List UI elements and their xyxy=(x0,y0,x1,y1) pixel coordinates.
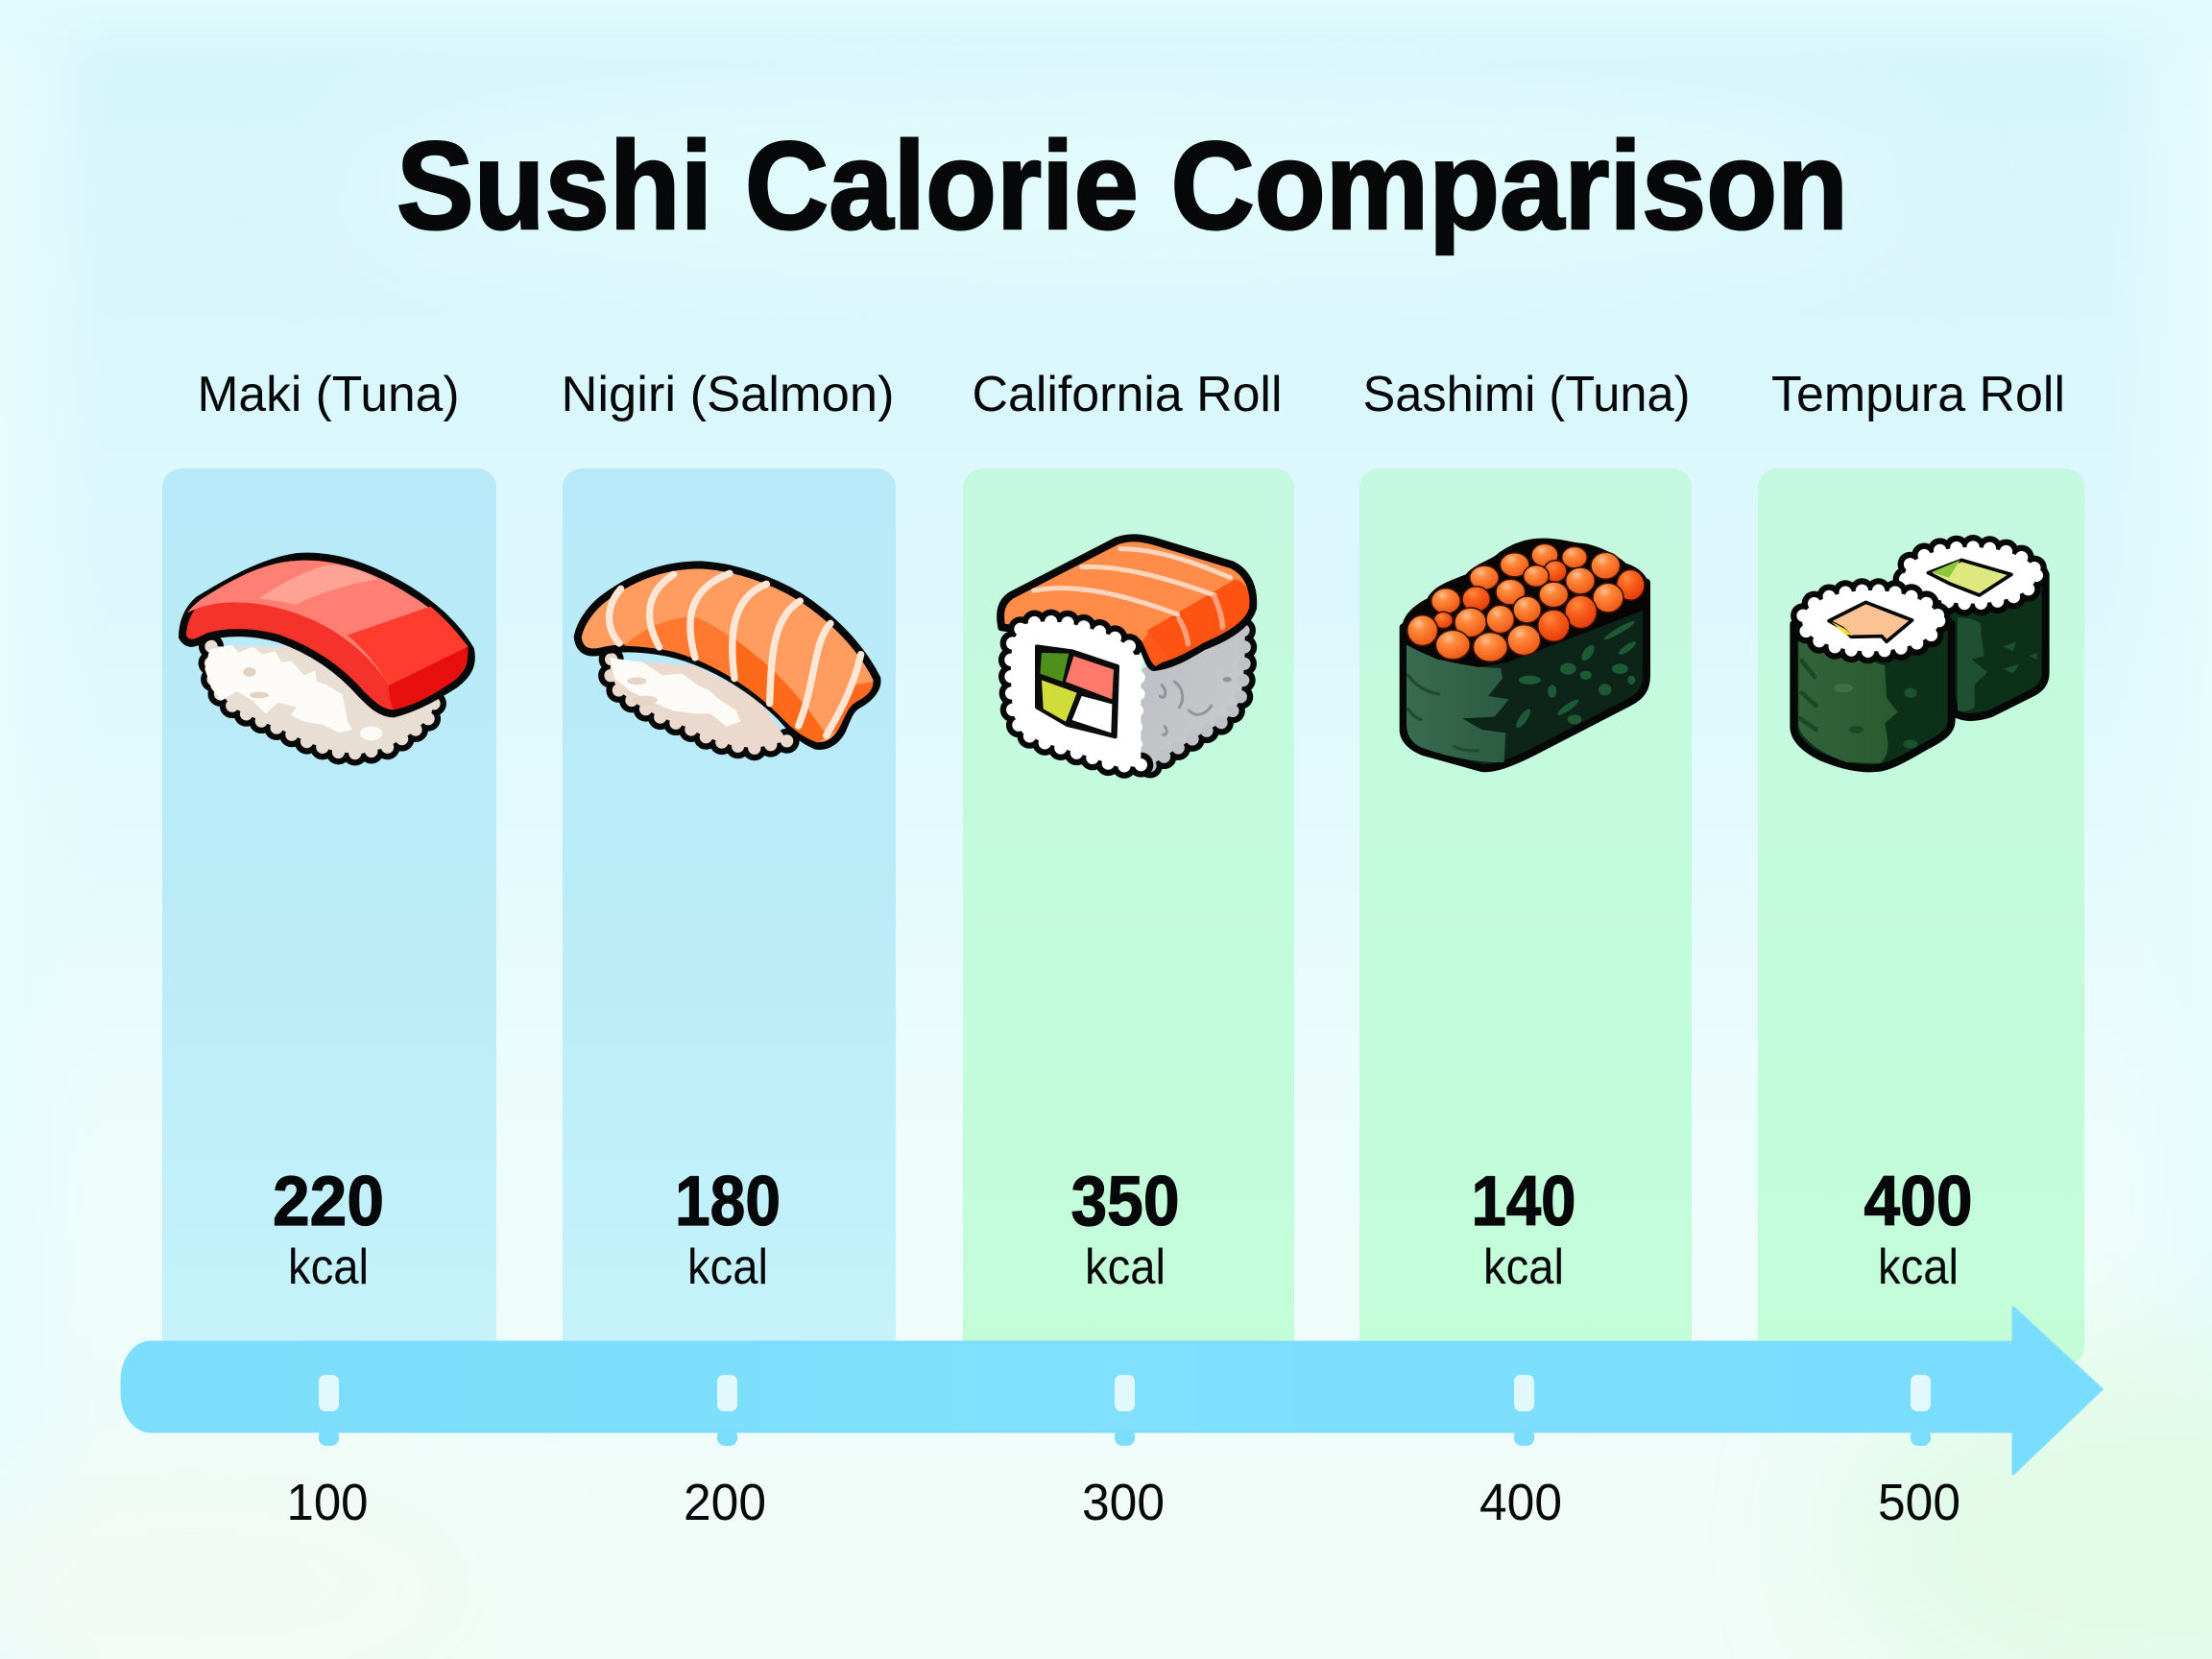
calorie value: 180 kcal: 180 xyxy=(675,1163,781,1240)
calorie value: 220 kcal: 220 xyxy=(273,1163,384,1240)
calorie value: 350 kcal xyxy=(1071,1163,1179,1295)
axis label: 300: 300 xyxy=(1082,1474,1165,1531)
label: Tempura Roll: Tempura Roll xyxy=(1771,367,2065,422)
title: Sushi Calorie Comparison xyxy=(397,115,1848,255)
calorie value: 400 kcal: 400 xyxy=(1864,1163,1972,1240)
icon: tempura roll xyxy=(1793,547,2046,768)
label: Sashimi (Tuna): Sashimi (Tuna) xyxy=(1363,367,1690,422)
label: Nigiri (Salmon): Nigiri (Salmon) xyxy=(561,367,895,422)
calorie value: 350 kcal: kcal xyxy=(1085,1239,1166,1295)
axis label: 100: 100 xyxy=(286,1474,369,1531)
label: California Roll: California Roll xyxy=(972,367,1283,422)
calorie value: 220 kcal: kcal xyxy=(288,1239,369,1295)
tick: 100 xyxy=(286,1375,369,1531)
icon: tuna nigiri xyxy=(182,557,471,754)
panel: Sashimi (Tuna) xyxy=(1359,367,1692,1373)
tick: 300 xyxy=(1082,1375,1165,1531)
calorie value: 400 kcal xyxy=(1864,1163,1972,1295)
axis label: 500: 500 xyxy=(1878,1474,1960,1531)
icon: california roll xyxy=(1000,538,1253,768)
calorie value: 140 kcal xyxy=(1471,1163,1576,1295)
axis label: 400: 400 xyxy=(1479,1474,1562,1531)
tick: 400 xyxy=(1479,1375,1562,1531)
panel: Nigiri (Salmon) xyxy=(561,367,896,1373)
panel: Maki (Tuna) xyxy=(162,367,496,1373)
panel: California Roll xyxy=(963,367,1294,1373)
calorie value: 140 kcal: kcal xyxy=(1483,1239,1564,1295)
icon: salmon nigiri xyxy=(578,565,878,748)
calorie value: 180 kcal: kcal xyxy=(687,1239,768,1295)
calorie value: 140 kcal: 140 xyxy=(1471,1163,1576,1240)
calorie value: 220 kcal xyxy=(273,1163,384,1295)
icon: gunkan with roe xyxy=(1402,539,1649,768)
calorie value: 350 kcal: 350 xyxy=(1071,1163,1179,1240)
axis arrow xyxy=(122,1308,2102,1474)
calorie value: 180 kcal xyxy=(675,1163,781,1295)
label: Maki (Tuna): Maki (Tuna) xyxy=(198,367,459,422)
axis label: 200: 200 xyxy=(684,1474,766,1531)
tick: 500 xyxy=(1878,1375,1960,1531)
tick: 200 xyxy=(684,1375,766,1531)
calorie value: 400 kcal: kcal xyxy=(1878,1239,1959,1295)
panel: Tempura Roll xyxy=(1758,367,2084,1365)
